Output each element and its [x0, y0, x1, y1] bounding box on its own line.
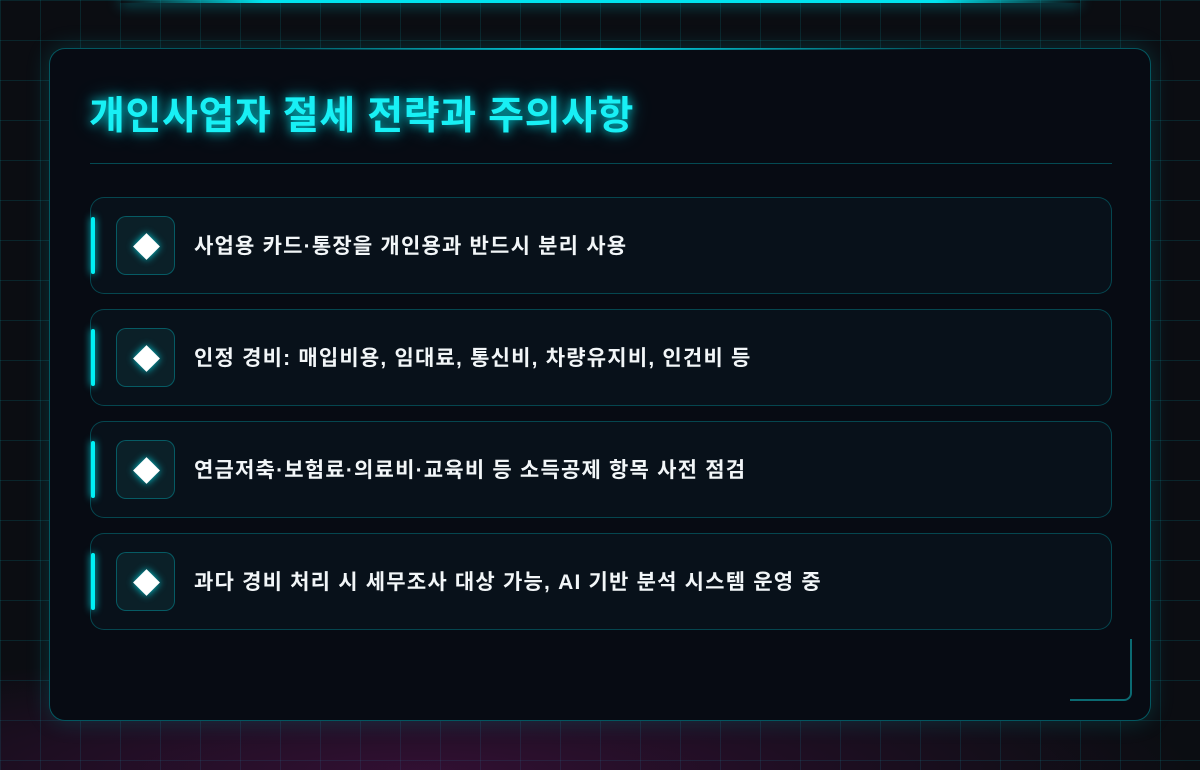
text 4: 과다 경비 처리 시 세무조사 대상 가능, AI 기반 분석 시스템 운영 중 [194, 571, 822, 594]
icon: diamond [116, 216, 175, 275]
title: 개인사업자 절세 전략과 주의사항 [89, 95, 634, 138]
text 3: 연금저축·보험료·의료비·교육비 등 소득공제 항목 사전 점검 [194, 459, 746, 482]
item 4 [90, 533, 1112, 630]
text 1: 사업용 카드·통장을 개인용과 반드시 분리 사용 [194, 235, 627, 258]
item 2 [90, 309, 1112, 406]
icon: diamond [116, 440, 175, 499]
icon: diamond [116, 552, 175, 611]
icon: diamond [116, 328, 175, 387]
item 1 [90, 197, 1112, 294]
text 2: 인정 경비: 매입비용, 임대료, 통신비, 차량유지비, 인건비 등 [194, 347, 752, 370]
item 3 [90, 421, 1112, 518]
